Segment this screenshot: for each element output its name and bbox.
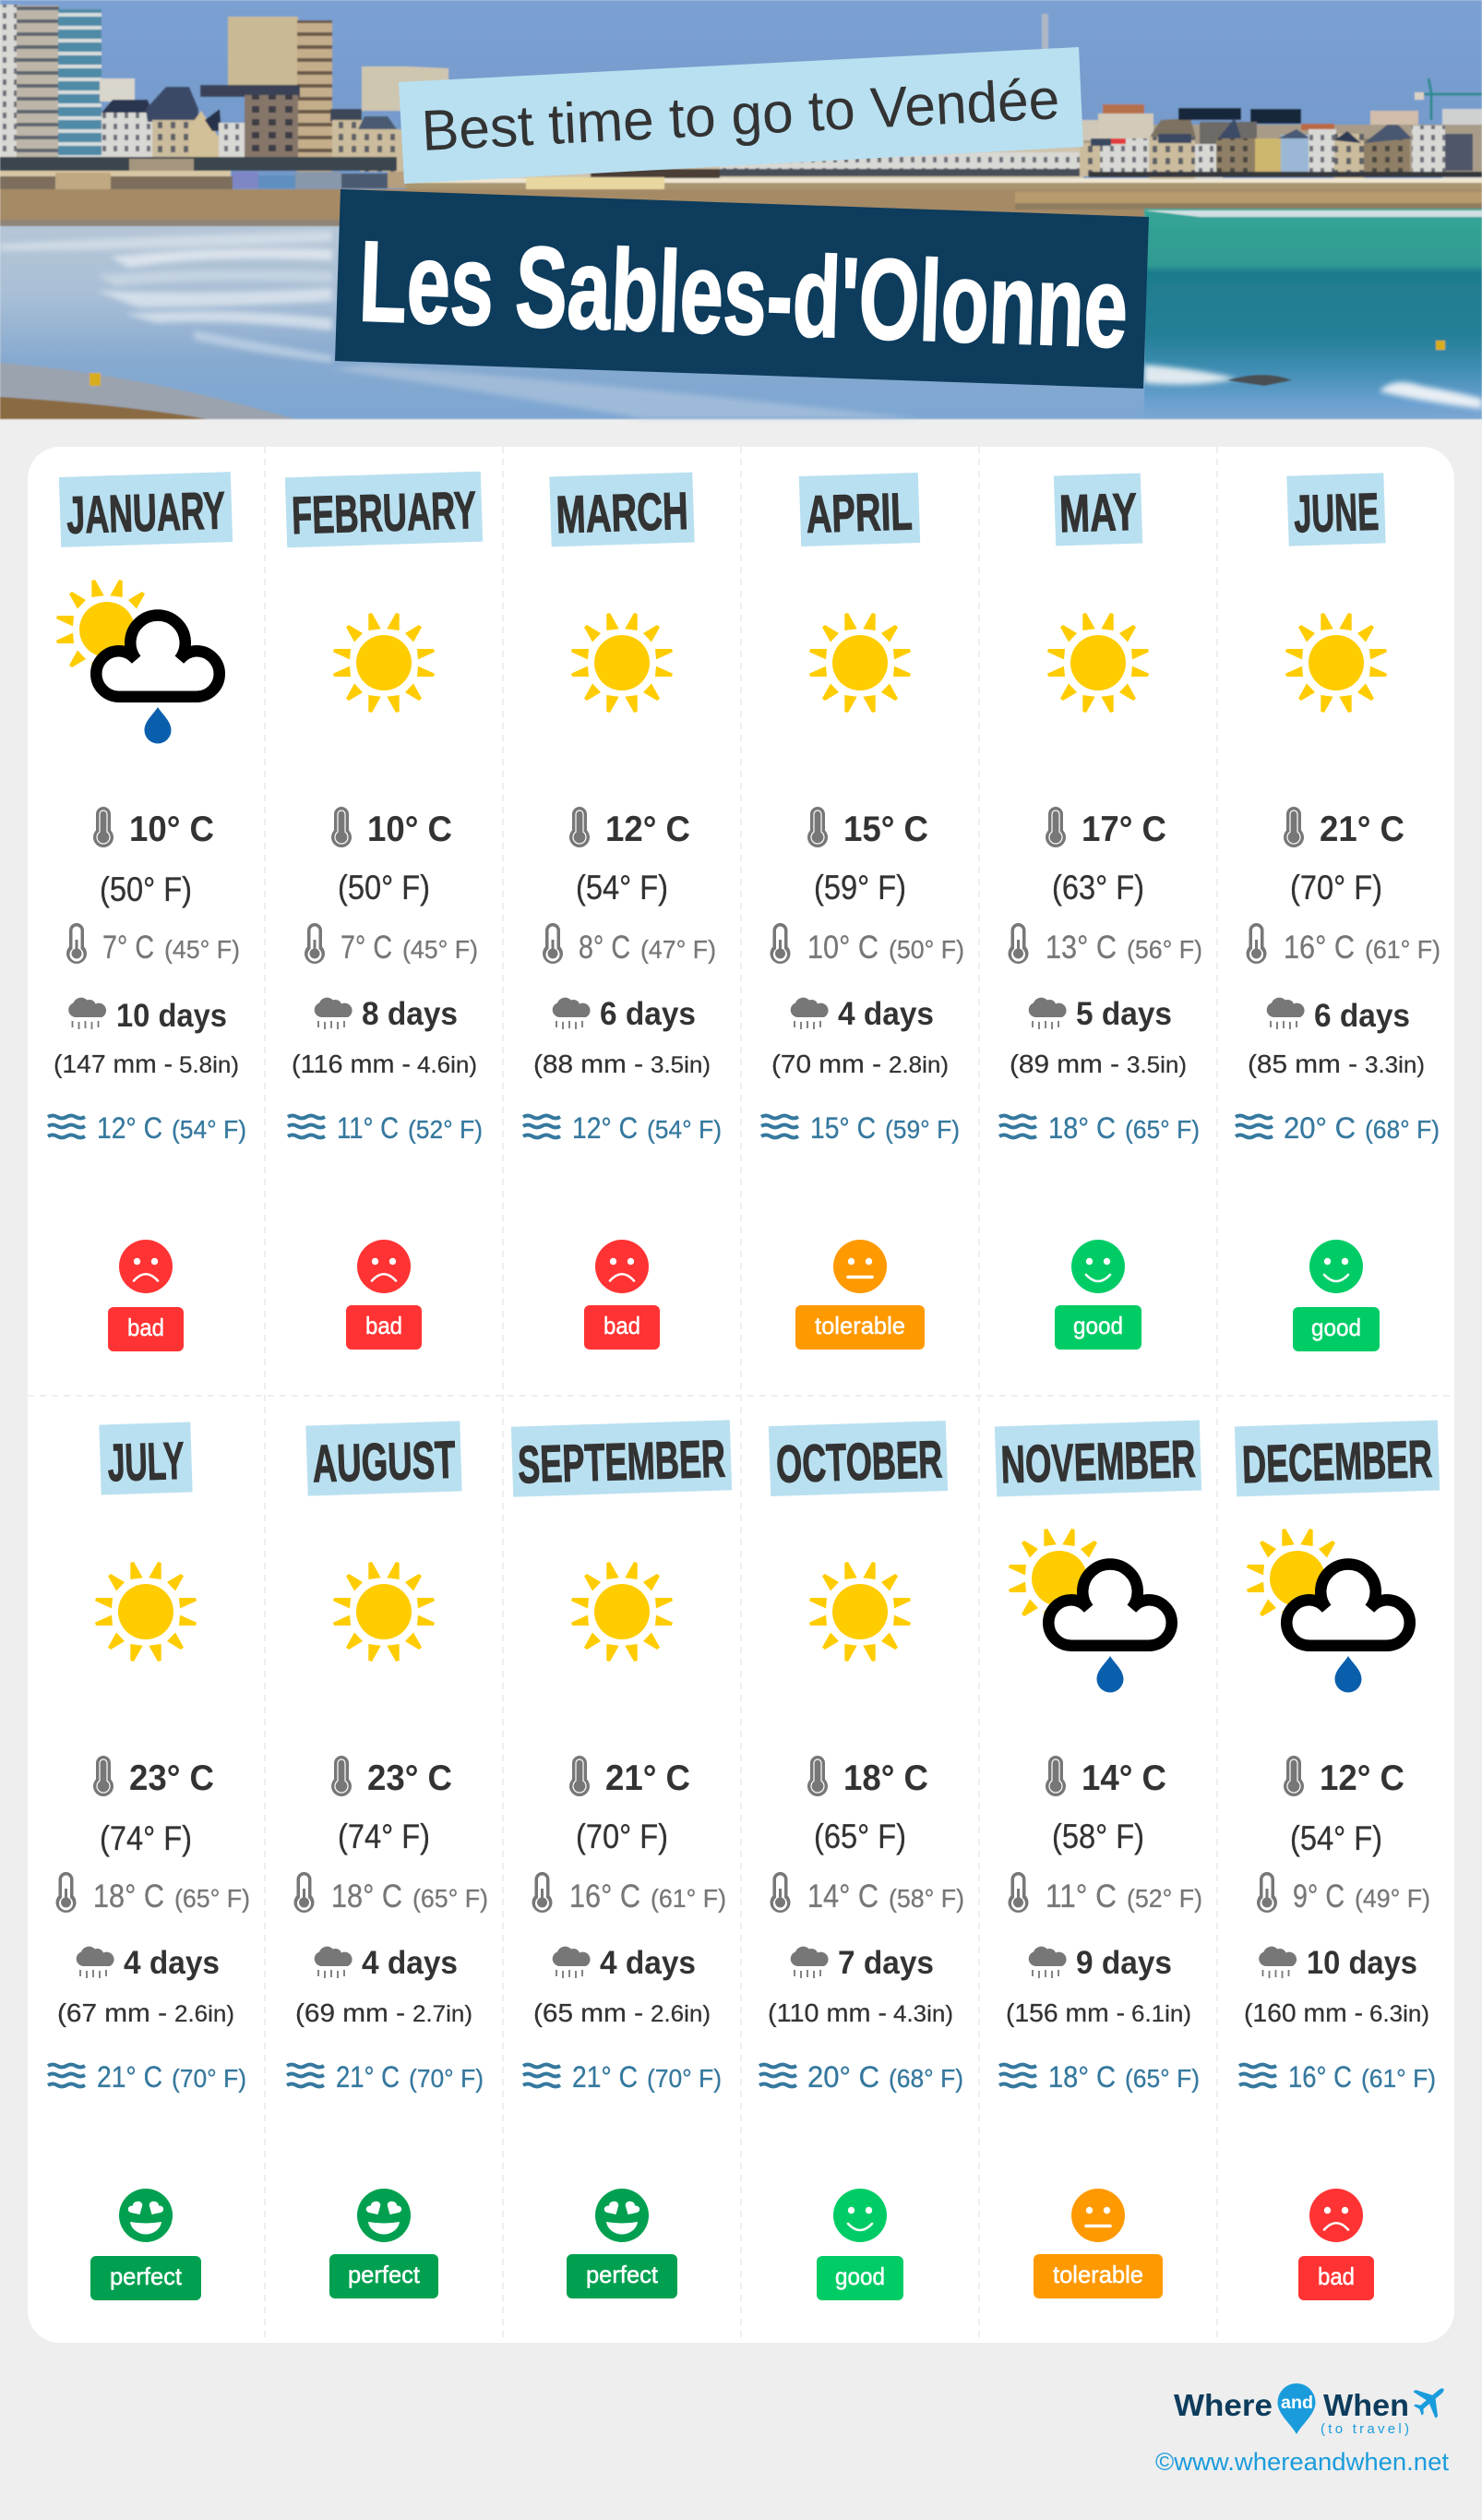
rating tag: perfect — [110, 2262, 183, 2290]
sea temperature: (68° F) — [889, 2064, 963, 2093]
panel: January — [48, 472, 246, 1351]
precipitation — [295, 1998, 472, 2027]
panel: May — [999, 474, 1202, 1350]
low temperature: 16° C — [569, 1878, 640, 1914]
month label — [1054, 474, 1142, 546]
month label: APRIL — [806, 482, 914, 545]
month label: MAY — [1058, 483, 1138, 544]
sea temperature — [288, 1111, 483, 1145]
low temperature: (45° F) — [164, 935, 240, 964]
subtitle ribbon — [399, 47, 1083, 184]
icon: sun — [1285, 613, 1387, 713]
logo: Where and When: (to travel) — [1321, 2421, 1409, 2437]
month label — [1286, 473, 1386, 546]
low temperature — [1257, 1872, 1430, 1914]
low temperature: (58° F) — [889, 1884, 964, 1913]
high temperature: 10° C — [367, 810, 452, 849]
month label: SEPTEMBER — [517, 1429, 726, 1495]
sea temperature: 20° C — [807, 2060, 879, 2094]
sea temperature: 21° C — [336, 2060, 400, 2094]
sea temperature: (59° F) — [885, 1115, 960, 1144]
sea temperature — [761, 1111, 960, 1145]
high temperature — [331, 1756, 452, 1798]
rainy days — [553, 996, 696, 1032]
icon: happy face — [833, 2189, 887, 2242]
panel: April — [761, 473, 964, 1350]
high temperature: 17° C — [1082, 810, 1166, 849]
rating tag: good — [1073, 1312, 1123, 1339]
sea temperature: (70° F) — [647, 2064, 722, 2093]
high temperature — [1046, 1756, 1166, 1798]
sea temperature: 18° C — [1048, 2060, 1116, 2094]
high temperature Fahrenheit: (54° F) — [576, 869, 668, 906]
high temperature: 14° C — [1082, 1758, 1166, 1798]
month label — [285, 472, 483, 547]
high temperature — [93, 1756, 214, 1798]
panel: June — [1236, 473, 1440, 1351]
high temperature — [807, 1756, 928, 1798]
low temperature: (65° F) — [412, 1884, 488, 1913]
precipitation — [771, 1050, 949, 1078]
rating tag — [1055, 1305, 1141, 1350]
low temperature: (50° F) — [889, 935, 964, 964]
precipitation: (70 mm - — [771, 1050, 881, 1078]
rainy days — [791, 996, 934, 1032]
low temperature: 9° C — [1293, 1878, 1345, 1914]
month label — [769, 1421, 948, 1496]
month label: OCTOBER — [775, 1430, 943, 1494]
high temperature Fahrenheit: (50° F) — [338, 869, 430, 906]
low temperature — [532, 1872, 726, 1914]
precipitation: (67 mm - — [57, 1998, 167, 2027]
low temperature: 7° C — [102, 930, 154, 966]
low temperature — [1008, 1872, 1202, 1914]
low temperature: (61° F) — [1365, 935, 1440, 964]
precipitation: 6.3in) — [1369, 2001, 1429, 2027]
panel: September — [511, 1420, 732, 2298]
high temperature — [1284, 807, 1404, 849]
sea temperature: (65° F) — [1125, 1115, 1200, 1144]
icon: sun — [333, 1562, 435, 1662]
month label — [305, 1421, 462, 1496]
rainy days — [315, 1945, 458, 1981]
rating tag — [329, 2254, 438, 2298]
precipitation: (160 mm - — [1244, 1998, 1363, 2027]
icon: sun — [809, 1562, 911, 1662]
high temperature Fahrenheit: (58° F) — [1052, 1818, 1144, 1855]
high temperature: 12° C — [1320, 1758, 1404, 1798]
icon: heart-eyes face — [595, 2189, 649, 2242]
high temperature — [1046, 807, 1166, 849]
high temperature — [569, 1756, 690, 1798]
high temperature Fahrenheit: (74° F) — [100, 1819, 192, 1857]
low temperature: 11° C — [1046, 1878, 1117, 1914]
sea temperature: 15° C — [810, 1111, 876, 1145]
rainy days — [553, 1945, 696, 1981]
month label: FEBRUARY — [291, 481, 477, 546]
sea temperature: 18° C — [1048, 1111, 1116, 1145]
low temperature: 10° C — [807, 930, 878, 966]
sea temperature: 11° C — [337, 1111, 399, 1145]
rainy days: 9 days — [1076, 1945, 1172, 1981]
icon: happy face — [1309, 1240, 1363, 1293]
rating tag: bad — [127, 1314, 164, 1341]
low temperature — [770, 923, 964, 966]
sea temperature: (54° F) — [172, 1115, 246, 1144]
header photo: seafront of Les Sables-d'Olonne — [0, 0, 1482, 419]
precipitation: (88 mm - — [533, 1050, 643, 1078]
icon: sun behind rain cloud — [56, 580, 220, 744]
low temperature: 13° C — [1046, 930, 1117, 966]
precipitation: (69 mm - — [295, 1998, 405, 2027]
rating tag: bad — [365, 1312, 402, 1339]
high temperature: 10° C — [129, 810, 214, 849]
low temperature: 14° C — [807, 1878, 878, 1914]
icon: neutral face — [833, 1240, 887, 1293]
icon: sun behind rain cloud — [1009, 1529, 1172, 1693]
precipitation — [1010, 1050, 1187, 1078]
rating tag — [1293, 1307, 1380, 1351]
precipitation: 3.5in) — [651, 1052, 711, 1078]
low temperature: (47° F) — [640, 935, 716, 964]
precipitation: (110 mm - — [768, 1998, 887, 2027]
sea temperature: (70° F) — [409, 2064, 484, 2093]
rating tag — [1298, 2256, 1374, 2300]
rainy days — [791, 1945, 934, 1981]
precipitation: 2.6in) — [174, 2001, 234, 2027]
icon: sad face — [357, 1240, 411, 1293]
high temperature Fahrenheit: (54° F) — [1290, 1819, 1382, 1857]
low temperature: 8° C — [579, 930, 630, 966]
rainy days: 10 days — [1307, 1945, 1417, 1981]
rating tag: perfect — [348, 2261, 421, 2288]
icon: sun — [809, 613, 911, 713]
icon: sun — [1047, 613, 1149, 713]
rainy days: 10 days — [116, 998, 227, 1034]
high temperature: 18° C — [843, 1758, 928, 1798]
icon: sun — [571, 613, 673, 713]
precipitation: (156 mm - — [1006, 1998, 1125, 2027]
icon: heart-eyes face — [119, 2189, 173, 2242]
high temperature Fahrenheit: (59° F) — [814, 869, 906, 906]
high temperature: 21° C — [1320, 810, 1404, 849]
sea temperature — [999, 1111, 1200, 1145]
precipitation — [292, 1050, 477, 1078]
rainy days — [1267, 998, 1410, 1034]
rainy days: 4 days — [362, 1945, 458, 1981]
rating tag: bad — [604, 1312, 640, 1339]
month label: AUGUST — [312, 1431, 457, 1494]
precipitation — [1244, 1998, 1429, 2027]
month label — [549, 473, 695, 546]
rainy days: 4 days — [600, 1945, 696, 1981]
precipitation: 4.6in) — [417, 1052, 477, 1078]
low temperature: 16° C — [1284, 930, 1355, 966]
high temperature — [1284, 1756, 1404, 1798]
low temperature — [293, 1872, 488, 1914]
precipitation: 6.1in) — [1131, 2001, 1191, 2027]
precipitation: (147 mm - — [54, 1050, 173, 1078]
month label: JUNE — [1293, 483, 1380, 544]
sea temperature: (65° F) — [1125, 2064, 1200, 2093]
rating tag: good — [1311, 1314, 1361, 1341]
low temperature — [543, 923, 716, 966]
rating tag — [108, 1307, 184, 1351]
low temperature: (49° F) — [1355, 1884, 1430, 1913]
icon: sad face — [119, 1240, 173, 1293]
panel: October — [759, 1421, 964, 2300]
rating tag: bad — [1318, 2262, 1355, 2290]
icon: map pin: and — [1281, 2394, 1313, 2413]
rainy days: 7 days — [838, 1945, 934, 1981]
precipitation: (116 mm - — [292, 1050, 411, 1078]
month label: MARCH — [556, 482, 689, 545]
sea temperature — [759, 2060, 963, 2094]
low temperature — [55, 1872, 250, 1914]
high temperature: 15° C — [843, 810, 928, 849]
precipitation: 2.6in) — [651, 2001, 711, 2027]
sea temperature — [999, 2060, 1200, 2094]
sea temperature — [1239, 2060, 1436, 2094]
rainy days: 4 days — [124, 1945, 220, 1981]
rainy days: 4 days — [838, 996, 934, 1032]
month label — [995, 1421, 1201, 1496]
month label — [59, 472, 233, 547]
icon: sad face — [595, 1240, 649, 1293]
rainy days — [315, 996, 458, 1032]
precipitation: (65 mm - — [533, 1998, 643, 2027]
rainy days: 6 days — [1314, 998, 1410, 1034]
rating tag — [817, 2256, 903, 2300]
sea temperature: 12° C — [97, 1111, 162, 1145]
website credit: ©www.whereandwhen.net — [1155, 2448, 1449, 2476]
sea temperature: (70° F) — [172, 2064, 246, 2093]
sea temperature — [523, 1111, 722, 1145]
rating tag — [795, 1305, 925, 1350]
sea temperature — [287, 2060, 484, 2094]
low temperature: (56° F) — [1127, 935, 1202, 964]
month label — [511, 1420, 732, 1497]
sea temperature: (61° F) — [1361, 2064, 1436, 2093]
precipitation — [1006, 1998, 1191, 2027]
high temperature: 23° C — [367, 1758, 452, 1798]
icon: sad face — [1309, 2189, 1363, 2242]
low temperature: (52° F) — [1127, 1884, 1202, 1913]
low temperature — [1246, 923, 1440, 966]
low temperature — [305, 923, 478, 966]
icon: heart-eyes face — [357, 2189, 411, 2242]
high temperature Fahrenheit: (65° F) — [814, 1818, 906, 1855]
month label: JANUARY — [66, 481, 226, 546]
precipitation: 2.7in) — [412, 2001, 472, 2027]
high temperature: 23° C — [129, 1758, 214, 1798]
sea temperature — [48, 2060, 246, 2094]
high temperature Fahrenheit: (63° F) — [1052, 869, 1144, 906]
month label: JULY — [107, 1432, 185, 1493]
panel: months card — [28, 447, 1454, 2343]
rating tag — [90, 2256, 201, 2300]
panel: August — [287, 1421, 488, 2298]
rainy days — [1029, 996, 1172, 1032]
rainy days: 5 days — [1076, 996, 1172, 1032]
high temperature — [331, 807, 452, 849]
sea temperature — [1236, 1111, 1440, 1145]
low temperature: (45° F) — [402, 935, 478, 964]
sea temperature: (52° F) — [408, 1115, 483, 1144]
rating tag — [584, 1305, 660, 1350]
precipitation — [54, 1050, 239, 1078]
rating tag: perfect — [586, 2261, 659, 2288]
low temperature: (61° F) — [651, 1884, 726, 1913]
low temperature — [1008, 923, 1202, 966]
sea temperature: 16° C — [1288, 2060, 1352, 2094]
low temperature — [770, 1872, 964, 1914]
precipitation — [768, 1998, 953, 2027]
title ribbon: Les Sables-d'Olonne — [357, 218, 1129, 372]
low temperature: 18° C — [331, 1878, 402, 1914]
low temperature: (65° F) — [174, 1884, 250, 1913]
logo: Where and When — [1174, 2376, 1454, 2437]
precipitation: 4.3in) — [893, 2001, 953, 2027]
sea temperature: (68° F) — [1365, 1115, 1440, 1144]
logo: Where and When: Where — [1174, 2388, 1273, 2422]
sea temperature: 20° C — [1284, 1111, 1356, 1145]
high temperature — [807, 807, 928, 849]
icon: map pin — [1277, 2383, 1316, 2434]
rating tag: good — [835, 2262, 885, 2290]
subtitle ribbon: Best time to go to Vendée — [420, 67, 1061, 163]
icon: plane — [1406, 2376, 1454, 2424]
low temperature — [66, 923, 240, 966]
sea temperature: 21° C — [97, 2060, 162, 2094]
icon: sun — [571, 1562, 673, 1662]
month label — [799, 473, 920, 546]
panel: March — [523, 473, 722, 1350]
rating tag: tolerable — [815, 1312, 905, 1339]
precipitation: 5.8in) — [179, 1052, 239, 1078]
rating tag — [1034, 2254, 1163, 2298]
rating tag: tolerable — [1053, 2261, 1143, 2288]
precipitation — [533, 1050, 711, 1078]
sea temperature: (54° F) — [647, 1115, 722, 1144]
rainy days — [1259, 1945, 1417, 1981]
precipitation — [57, 1998, 234, 2027]
icon: sun — [333, 613, 435, 713]
icon: sun — [95, 1562, 197, 1662]
rating tag — [567, 2254, 677, 2298]
precipitation: (85 mm - — [1248, 1050, 1357, 1078]
icon: sun behind rain cloud — [1247, 1529, 1410, 1693]
low temperature: 7° C — [341, 930, 392, 966]
high temperature Fahrenheit: (74° F) — [338, 1818, 430, 1855]
rating tag — [346, 1305, 422, 1350]
panel: November — [995, 1421, 1202, 2298]
precipitation: (89 mm - — [1010, 1050, 1119, 1078]
panel: July — [48, 1422, 250, 2300]
rainy days: 6 days — [600, 996, 696, 1032]
sea temperature: 12° C — [572, 1111, 638, 1145]
panel: December — [1235, 1421, 1440, 2300]
month label: NOVEMBER — [1000, 1430, 1197, 1494]
title ribbon — [335, 189, 1149, 389]
high temperature Fahrenheit: (50° F) — [100, 870, 192, 908]
high temperature Fahrenheit: (70° F) — [576, 1818, 668, 1855]
panel: February — [285, 472, 483, 1350]
high temperature — [569, 807, 690, 849]
icon: happy face — [1071, 1240, 1125, 1293]
precipitation — [533, 1998, 711, 2027]
rainy days — [68, 998, 227, 1034]
precipitation: 3.3in) — [1365, 1052, 1425, 1078]
high temperature: 12° C — [605, 810, 690, 849]
high temperature Fahrenheit: (70° F) — [1290, 869, 1382, 906]
month label — [99, 1422, 193, 1495]
precipitation: 2.8in) — [889, 1052, 949, 1078]
low temperature: 18° C — [93, 1878, 164, 1914]
rainy days — [1029, 1945, 1172, 1981]
sea temperature — [48, 1111, 246, 1145]
logo: Where and When: When — [1323, 2388, 1409, 2422]
precipitation — [1248, 1050, 1425, 1078]
sea temperature: 21° C — [572, 2060, 638, 2094]
icon: neutral face — [1071, 2189, 1125, 2242]
rainy days — [77, 1945, 220, 1981]
high temperature — [93, 807, 214, 849]
sea temperature — [523, 2060, 722, 2094]
high temperature: 21° C — [605, 1758, 690, 1798]
precipitation: 3.5in) — [1127, 1052, 1187, 1078]
rainy days: 8 days — [362, 996, 458, 1032]
